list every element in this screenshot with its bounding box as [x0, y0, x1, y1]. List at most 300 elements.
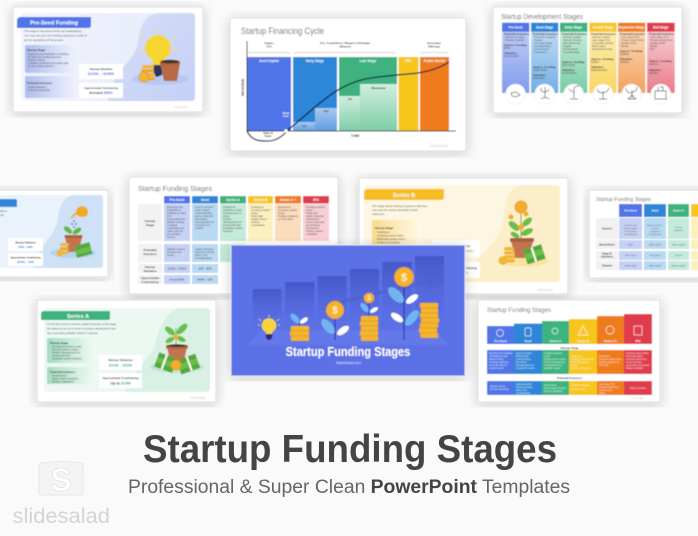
- column: expansion stage: $100M+: [620, 52, 630, 56]
- chart: funding stages columns: Public Market: [424, 59, 446, 63]
- text box: startup stage: Scaling up: [377, 230, 390, 234]
- table: body rows: Visible market: [306, 229, 323, 233]
- icon: coin stack medium with sprout: [359, 293, 379, 341]
- column: early stage: $10M-$30M: [562, 71, 577, 75]
- icon: coin tree with pot and money: [498, 201, 548, 266]
- column: early stage: Venture capital: [563, 35, 581, 39]
- chart: stepped stage columns: [487, 314, 652, 344]
- chart: funding stages columns: Even: [283, 115, 289, 118]
- text box: startup stage: Build high-quality teams: [377, 237, 406, 241]
- column: exit stage: Late stage VCs: [650, 35, 669, 39]
- text box: startup stage: Market testing: [28, 58, 45, 62]
- table: stage columns: [596, 204, 698, 270]
- chart: startup stage row: IPO track: [599, 364, 609, 367]
- logo: slidesalad: S: [50, 462, 72, 498]
- text box: potential investors: Venture capitalists: [52, 380, 74, 384]
- callout: approximate fundraising: [79, 83, 123, 98]
- column: seed stage: Government: [534, 47, 549, 51]
- chart: funding stages columns: Mezzanine: [372, 86, 386, 90]
- chart: startup stage row: Growing market share: [571, 358, 594, 361]
- chart: brackets and top labels: Angels,: [264, 41, 274, 45]
- table: body rows: Outline: [251, 220, 260, 224]
- chart: stepped stage columns: Series B: [577, 339, 589, 343]
- table: column headers: Series C +: [280, 198, 296, 202]
- table: body rows: into: [167, 214, 172, 218]
- text: footer brand: slidesalad: [537, 288, 553, 292]
- column: growth stage: [589, 23, 617, 93]
- column: pre-seed: $100-$150K: [504, 54, 519, 58]
- label: startup stage: Startup Stage: [560, 346, 579, 350]
- chart: potential investors row: Public investors: [630, 387, 647, 390]
- text: series b intro: can meet the various demands of their: [372, 208, 418, 212]
- text box: startup stage: [25, 45, 75, 73]
- heading: pre-seed funding: [17, 17, 91, 28]
- text: series b intro: customers.: [372, 212, 385, 216]
- chart: funding stages columns: Break: [283, 112, 290, 115]
- chart: revenue curve: [247, 62, 449, 141]
- table: body rows: Startup owners: [167, 247, 186, 251]
- column: early stage: Venture lenders: [563, 38, 582, 42]
- chart: potential investors row: Startup owners: [490, 385, 506, 388]
- arrow: growth arrow: [325, 275, 444, 307]
- table: body rows: Launch product: [195, 205, 214, 209]
- chart: potential investors row: Angel investors: [516, 383, 533, 386]
- column: expansion stage: Expansion Stage: [619, 26, 645, 30]
- table: body rows: share: [251, 211, 258, 215]
- column: pre-seed: $50K: [504, 46, 510, 50]
- text: series a intro: has to provide profitable results in revenue.: [47, 331, 99, 335]
- chart: brackets and top labels: Offerings: [428, 44, 440, 48]
- table: stage columns: capitalists: [674, 229, 684, 232]
- table: stage columns: Operations: [601, 256, 614, 258]
- heading: series a: Series A: [67, 314, 89, 320]
- text box: startup stage: for the product launch: [28, 64, 55, 68]
- icon: tall coin stack: [419, 303, 439, 338]
- callout: startup valuation: $3M – $6M: [18, 245, 33, 249]
- table: body rows: Exploring the: [167, 205, 183, 209]
- table: body rows: $3M – $6M: [199, 266, 211, 270]
- text box: startup stage: product/service: [52, 354, 71, 358]
- table: body rows: sales plan for: [167, 229, 183, 233]
- text box: startup stage: Startup Stage: [50, 341, 69, 345]
- table: stage columns: venture: [651, 227, 659, 230]
- table: stage columns: Valuation: [602, 264, 613, 268]
- column: growth stage: Approx. Funding: [591, 57, 614, 61]
- text: axis labels: Valley Of: [263, 132, 273, 135]
- table: stage columns: Friends and: [625, 224, 637, 227]
- callout: startup valuation: $100K – $150K: [88, 72, 115, 76]
- heading: startup funding stages: Startup Funding Stages: [487, 307, 552, 314]
- text box: startup stage: [47, 338, 95, 363]
- chart: startup stage row: Market credibility: [626, 367, 644, 370]
- text: footer brand: slidesalad: [190, 396, 206, 400]
- table: body rows: Approximate: [141, 276, 159, 280]
- table: stage columns: $1M to $5M: [625, 264, 636, 268]
- chart: stepped stage columns: Seed: [525, 339, 532, 343]
- column: expansion stage: $500M+: [620, 60, 630, 64]
- table: body rows: Scalable market: [223, 226, 243, 230]
- table: stage columns: Pre-Seed: [624, 208, 637, 212]
- column: pre-seed: Friends & family: [505, 38, 525, 42]
- column: growth stage: Late stage VCs: [592, 38, 611, 42]
- table: body rows: share: [306, 208, 313, 212]
- chart: funding stages columns: Early Stage: [306, 59, 324, 63]
- chart: startup stage row: product for market: [516, 367, 535, 370]
- panel: stepped funding stages slide: [478, 300, 660, 402]
- heading: series a: [41, 311, 110, 320]
- icon: light bulb with pot and coins: [132, 29, 188, 85]
- text: axis labels: TIME: [351, 134, 360, 138]
- table: body rows: Market testing: [167, 220, 184, 224]
- column: seed stage: Approx. Funding: [533, 65, 556, 69]
- heading: startup financing cycle: Startup Financing Cycle: [241, 26, 324, 37]
- chart: startup stage row: Growing business: [544, 352, 563, 355]
- table: body rows: business model: [223, 208, 242, 212]
- table: body rows: Expansion: [278, 205, 291, 209]
- chart: potential investors row: Hedge funds: [599, 390, 613, 392]
- icons: stage circles: [506, 84, 671, 104]
- table: stage columns: Very young: [650, 254, 661, 257]
- table: stage columns: Investors: [602, 228, 613, 230]
- chart: startup stage row: teams: [571, 364, 578, 367]
- logo: slidesalad: [12, 462, 110, 528]
- callout: startup valuation: $10M – $30M: [109, 364, 132, 368]
- column: early stage: Potential Investors: [562, 32, 587, 36]
- table: stage columns: accelerators,: [624, 230, 637, 233]
- table: body rows: Crowdfunding: [195, 256, 212, 260]
- table: body rows: footprint: [223, 229, 233, 233]
- table: body rows: Valuation: [143, 269, 157, 273]
- column: exit stage: Hedge funds: [650, 41, 666, 45]
- column: pre-seed: Approx. Funding: [504, 43, 527, 47]
- table: body rows: launch: [167, 235, 175, 239]
- column: seed stage: Potential Investors: [533, 32, 558, 36]
- text: intro fragment: ally to: [0, 209, 8, 213]
- callout: approximate fundraising: [99, 373, 142, 388]
- table: body rows: the product: [167, 232, 181, 236]
- callout: approximate fundraising: $500K – $2M: [17, 260, 35, 264]
- chart: funding stages columns: Late Stage: [360, 59, 376, 63]
- text box: potential investors: Accelerators: [52, 374, 68, 378]
- table: stage columns: Money Raised: [599, 244, 615, 246]
- table: column headers: Series B: [254, 198, 268, 202]
- column: expansion stage: Valuation: [620, 57, 633, 61]
- column: early stage: Crowdfunding: [563, 50, 580, 54]
- table: stage columns: Venture: [675, 226, 683, 229]
- chart: potential investors row: Growth funds: [571, 388, 586, 391]
- heading: series b: Series B: [393, 193, 415, 199]
- text: series a intro: It's the first round of venture capital financing. In this stage: [47, 322, 117, 326]
- chart: startup stage row: Further progress on: [599, 361, 620, 364]
- table: stage columns: Growth: [675, 254, 683, 257]
- table: body rows: development of: [223, 220, 242, 224]
- chart: startup stage row: Good corporate: [626, 361, 643, 364]
- column: exit stage: IPO: [650, 47, 655, 51]
- table: body rows: a product for: [195, 223, 210, 227]
- table: stage columns: Series A: [673, 208, 684, 212]
- column: growth stage: Bank loans: [592, 44, 606, 48]
- table: body rows: Further progress: [278, 214, 299, 218]
- chart: funding stages columns: [247, 57, 449, 131]
- column: pre-seed: Potential Investors: [504, 32, 529, 36]
- column: exit stage: Valuation: [649, 68, 662, 72]
- table: body rows: Friends & family: [195, 250, 215, 254]
- table: body rows: share: [278, 211, 285, 215]
- chart: startup stage row: Recruiting: [516, 361, 527, 364]
- chart: stepped stage columns: Series A: [550, 339, 562, 343]
- table: body rows: competitors: [251, 223, 266, 227]
- icon: coin flower: [319, 301, 351, 340]
- column: pre-seed: [502, 23, 529, 93]
- text box: startup stage: Further development of: [52, 350, 80, 354]
- callout: approximate fundraising: [8, 253, 43, 266]
- column: growth stage: Growth Stage: [593, 26, 614, 30]
- table: body rows: Fundraising: [141, 280, 159, 284]
- table: stage columns: $50K: [628, 244, 634, 246]
- text: intro fragment: [0, 209, 8, 217]
- table: column headers: Seed: [201, 198, 209, 202]
- chart: potential investors row: Accelerators: [544, 384, 558, 387]
- text: series b intro: This stage allows startups to grow so that they: [372, 204, 428, 208]
- chart: potential investors row: Micro VCs: [516, 389, 527, 392]
- column: expansion stage: Hedge funds: [621, 41, 637, 45]
- icon: light bulb: [258, 315, 280, 340]
- heading: series header: [0, 199, 17, 207]
- table: body rows: Stage: [146, 223, 154, 227]
- table: body rows: governance: [306, 223, 321, 227]
- column: pre-seed: Startups (Angel): [505, 35, 525, 39]
- chart: startup stage row: of product/service: [544, 364, 563, 367]
- icon: plant with pot, money and coin: [150, 322, 204, 375]
- column: seed stage: Angels: [534, 38, 543, 42]
- icon: tall coin flower: [385, 268, 421, 340]
- text: series a intro: the startup is set out in terms of product development and: [47, 326, 116, 330]
- table: column headers: [164, 196, 329, 204]
- callout: startup valuation: [79, 64, 123, 79]
- column: seed stage: Crowdfunding: [534, 44, 551, 48]
- callout: approximate fundraising: Approximate Fundraising: [84, 86, 118, 90]
- column: expansion stage: Private equity firms: [621, 38, 645, 42]
- table: stage columns: crowdfunding: [648, 233, 662, 236]
- heading: pre-seed funding: Pre-Seed Funding: [30, 21, 79, 27]
- table: body rows: understanding: [195, 211, 213, 215]
- chart: potential investors row: [487, 381, 652, 395]
- table: column headers: Pre-Seed: [170, 198, 184, 202]
- subtitle: Professional & Super Clean PowerPoint Templates: [128, 477, 570, 498]
- text: pre-seed intro: [24, 29, 88, 42]
- column: seed stage: $3M-$6M: [533, 76, 545, 80]
- panel: left clipped slide: [0, 190, 108, 277]
- chart: startup stage row: governance developed: [626, 364, 650, 367]
- column: growth stage: Venture capital: [592, 35, 610, 39]
- text box: potential investors: Angel investors: [28, 85, 47, 89]
- text box: potential investors: [25, 76, 75, 98]
- chart: startup stage row: Profit and stable: [626, 355, 643, 358]
- callout: approximate fundraising: Approximate Fundraising: [10, 256, 41, 260]
- column: early stage: Early Stage: [565, 26, 583, 30]
- table: body rows: market: [195, 226, 203, 230]
- chart: startup stage row: product launch: [489, 367, 505, 370]
- chart: startup stage row: Outline competitors: [571, 367, 592, 370]
- column: exit stage: Private equity firms: [650, 38, 674, 42]
- chart: startup stage row: understanding: [516, 358, 531, 361]
- chart: potential investors row: Crowdfunding: [516, 392, 531, 395]
- table: body rows: Startup: [145, 265, 155, 269]
- icon: coin flower: $: [332, 306, 338, 316]
- column: seed stage: Valuation: [533, 73, 546, 77]
- column: expansion stage: Approx. Funding: [620, 49, 643, 53]
- text: series b intro: [372, 204, 428, 216]
- table: body rows: feasibility of: [167, 208, 181, 212]
- column: early stage: Approx. Funding: [562, 60, 585, 64]
- table: stage columns: crowdfunding: [624, 233, 638, 236]
- chart: startup stage row: Finding team in place: [544, 358, 567, 361]
- table: body rows: Good corporate: [306, 220, 325, 224]
- text box: startup stage: [372, 220, 422, 250]
- table: body rows: Development of: [195, 220, 214, 224]
- table: column headers: Series A: [226, 198, 240, 202]
- heading: series b: [364, 189, 444, 200]
- panel: startup financing cycle slide: [230, 18, 466, 151]
- chart: stepped stage columns: IPO: [636, 339, 641, 343]
- column: seed stage: Incubators: [534, 50, 547, 54]
- chart: funding stages columns: 2nd: [324, 109, 329, 113]
- callout: approximate fundraising: Up to $15M: [110, 382, 131, 386]
- text: callout fragments: [466, 244, 477, 275]
- table: body rows: Growing market: [251, 208, 270, 212]
- table: stage columns: Stage Of: [602, 252, 612, 256]
- table: body rows: Around $50K: [169, 278, 185, 282]
- table: body rows: [138, 204, 329, 284]
- text box: potential investors: Potential Investors: [50, 370, 75, 374]
- text box: potential investors: Potential Investors: [27, 81, 52, 85]
- text box: startup stage: an idea into product/service: [28, 55, 61, 59]
- table: body rows: Micro VCs: [195, 253, 208, 257]
- label: potential investors: Potential Investors: [557, 376, 582, 380]
- chart: startup stage row: Further development: [544, 361, 566, 364]
- chart: brackets and top labels: VCS: [266, 44, 272, 48]
- column: growth stage: Corporate venture: [592, 41, 614, 45]
- panel: series a slide: [37, 300, 216, 402]
- table: body rows: developed: [306, 226, 319, 230]
- text box: startup stage: Creating marketing and sales plan: [28, 61, 69, 65]
- table: body rows: quality teams: [251, 217, 267, 221]
- table: body rows: Further: [223, 217, 232, 221]
- chart: startup stage row: of building an idea: [489, 356, 508, 358]
- column: exit stage: $500M+: [649, 71, 659, 75]
- column: early stage: Valuation: [562, 68, 575, 72]
- column: growth stage: $30M-$150M: [591, 68, 608, 72]
- chart: stepped stage columns: Pre-Seed: [494, 339, 507, 343]
- text box: startup stage: Startup Stage: [375, 226, 394, 230]
- callout: startup valuation: [99, 355, 142, 370]
- table: body rows: Angel investors: [195, 247, 214, 251]
- table: body rows: $100K – $150K: [168, 266, 186, 270]
- column: exit stage: Banks: [650, 44, 658, 48]
- chart: startup stage row: Build market: [516, 355, 529, 358]
- column: early stage: Angels: [563, 44, 572, 48]
- logo: slidesalad: slidesalad: [12, 505, 110, 528]
- column: expansion stage: Potential Investors: [620, 32, 645, 36]
- text: callout fragments: $50M: [466, 249, 474, 253]
- table: body rows: Creating: [167, 223, 178, 227]
- text: axis labels: [241, 78, 360, 138]
- chart: startup stage row: Expansion: [599, 356, 610, 358]
- text box: startup stage: Growing market share: [377, 234, 404, 238]
- chart: startup stage row: Increase market share: [599, 358, 623, 361]
- table: stage columns: Angel investors,: [647, 224, 663, 227]
- chart: potential investors row: Banks: [599, 393, 606, 395]
- heading: startup development stages: Startup Development Stages: [501, 12, 583, 21]
- table: stage columns: capitalists,: [650, 230, 660, 233]
- table: stage columns: $1M to $3M: [649, 244, 661, 246]
- text box: startup stage: Startup Stage: [27, 48, 46, 52]
- column: exit stage: Potential Investors: [649, 32, 674, 36]
- text: pre-seed intro: get the operations off the ground.: [24, 38, 64, 42]
- column: seed stage: Seed Stage: [536, 26, 553, 30]
- table: body rows: Increase market: [278, 208, 298, 212]
- table: stage columns: $5M to $15M: [672, 244, 685, 246]
- table: body rows: Scaling up: [223, 205, 236, 209]
- text: series a intro: [47, 322, 117, 335]
- column: seed stage: [531, 23, 558, 93]
- table: body rows: Potential: [144, 248, 156, 252]
- table: body rows: about customer: [195, 214, 214, 218]
- table: body rows: Growing market: [306, 205, 325, 209]
- icon: tall coin flower: $: [401, 272, 407, 284]
- table: body rows: build market: [195, 208, 210, 212]
- callout: startup valuation: [8, 238, 43, 251]
- table: stage columns: $3M to $6M: [649, 264, 661, 268]
- chart: funding stages columns: Seed Capital: [259, 59, 279, 63]
- callout: approximate fundraising: [432, 262, 480, 278]
- chart: startup stage row: Growing market share: [626, 352, 649, 355]
- table: body rows: credibility: [306, 232, 318, 236]
- chart: startup stage row: and sales plan for: [489, 364, 507, 367]
- column: early stage: $2M-$15M: [562, 63, 576, 67]
- text box: startup stage: Scalable market footprint: [52, 356, 82, 360]
- panel: right clipped table slide: [589, 190, 698, 278]
- text: footer brand: slidesalad: [430, 143, 448, 148]
- chart: potential investors row: Private equity firms: [599, 386, 619, 389]
- callout: startup valuation: [432, 240, 480, 257]
- chart: funding stages columns: 1st: [302, 124, 306, 128]
- table: body rows: statements: [306, 217, 320, 221]
- text: cover website: SlideSalad.com: [336, 361, 361, 365]
- table: body rows: family: [167, 253, 175, 257]
- table: stage columns: Seed: [652, 208, 659, 212]
- table: body rows: Recruiting: [195, 217, 208, 221]
- chart: brackets and top labels: [248, 41, 448, 54]
- panel: pre-seed funding slide: [13, 7, 203, 112]
- chart: background bars: [253, 256, 444, 330]
- chart: potential investors row: Friends & family: [516, 386, 533, 389]
- table: body rows: Startup: [145, 219, 155, 223]
- column: expansion stage: [618, 23, 645, 93]
- chart: brackets and top labels: VCs, Acquisitions / Mergers & Strategic: [320, 41, 371, 45]
- column: growth stage: $15M+: [591, 60, 600, 64]
- chart: potential investors row: Super angel investors: [544, 387, 567, 390]
- icon: coin stack small with sprout: [289, 312, 309, 341]
- column: exit stage: Exit Stage: [653, 26, 669, 30]
- table: body rows: product/service: [223, 223, 242, 227]
- text: callout fragments: M: [466, 271, 469, 275]
- chart: startup stage row: [487, 350, 652, 374]
- text box: potential investors: Super angel investors: [52, 376, 79, 380]
- text: footer brand: slidesalad: [174, 105, 188, 109]
- marker: break even point: [284, 129, 288, 133]
- panel: startup funding stages table slide: [129, 177, 338, 294]
